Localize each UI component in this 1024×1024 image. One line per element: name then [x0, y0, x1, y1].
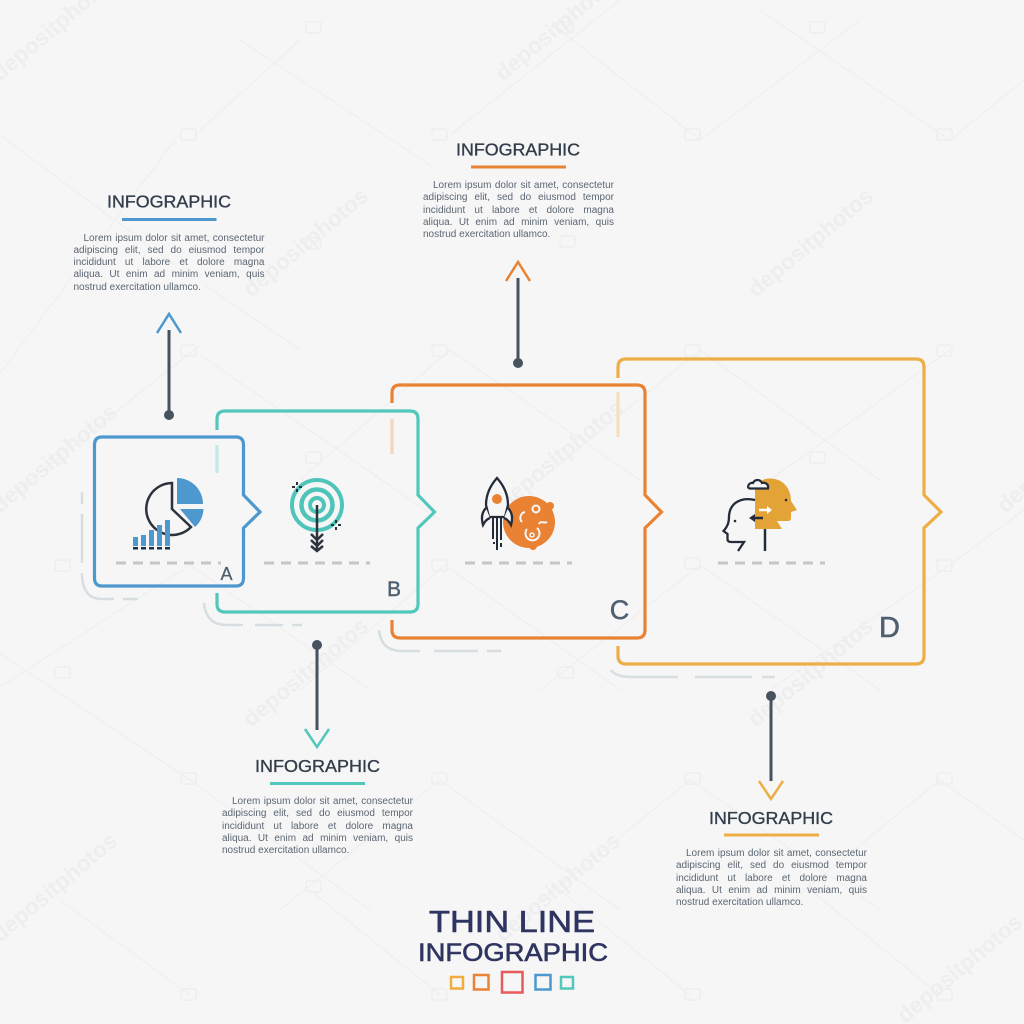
text block B: aliqua. Ut enim ad minim veniam, quis — [222, 833, 413, 844]
text block A: incididunt ut labore et dolore magna — [74, 257, 264, 268]
text block B: nostrud exercitation ullamco. — [222, 845, 349, 856]
heading C: INFOGRAPHIC — [456, 140, 580, 160]
arrow C: up from orange panel — [506, 262, 530, 368]
text block D: aliqua. Ut enim ad minim veniam, quis — [676, 885, 867, 896]
heading A — [107, 192, 231, 221]
arrow A: up from blue panel — [157, 314, 181, 420]
text: depositphotos — [238, 183, 373, 302]
text block A: nostrud exercitation ullamco. — [74, 282, 201, 292]
legend squares — [451, 972, 573, 992]
icon: pie chart and bars — [133, 478, 204, 550]
title: THIN LINE — [429, 905, 595, 939]
text: depositphotos — [238, 613, 373, 732]
text block C: nostrud exercitation ullamco. — [423, 229, 550, 240]
text: depositphotos — [743, 613, 878, 732]
text block C: Lorem ipsum dolor sit amet, consectetur — [433, 180, 614, 191]
text block D: adipiscing elit, sed do eiusmod tempor — [676, 860, 867, 871]
heading D — [709, 808, 833, 836]
text block C: adipiscing elit, sed do eiusmod tempor — [423, 192, 614, 203]
heading B — [255, 756, 380, 785]
panel D: yellow square with notch — [611, 359, 941, 677]
text block B: incididunt ut labore et dolore magna — [222, 820, 413, 832]
text block D: Lorem ipsum dolor sit amet, consectetur — [686, 848, 867, 859]
text block A: Lorem ipsum dolor sit amet, consectetur — [84, 232, 264, 244]
panel A dashed line — [116, 562, 221, 564]
panel B letter: B — [387, 578, 401, 601]
panel A: blue square with notch — [82, 437, 260, 599]
text block D — [676, 848, 867, 908]
text block C: aliqua. Ut enim ad minim veniam, quis — [423, 217, 614, 228]
text: depositphotos — [493, 395, 628, 514]
heading C — [456, 140, 580, 168]
icon: target and arrow — [292, 480, 342, 551]
panel C shadow — [379, 630, 501, 651]
heading A: INFOGRAPHIC — [107, 192, 231, 212]
icon: rocket and planet — [482, 478, 555, 550]
panel C: orange square with notch — [379, 385, 662, 651]
arrow B: down from teal panel — [305, 640, 329, 747]
text block C — [423, 180, 614, 240]
title — [418, 905, 608, 967]
heading B: INFOGRAPHIC — [255, 756, 380, 776]
panel B: teal square with notch — [204, 411, 434, 625]
text block B: Lorem ipsum dolor sit amet, consectetur — [232, 796, 413, 807]
text block A: adipiscing elit, sed do eiusmod tempor — [74, 245, 264, 256]
text block B: adipiscing elit, sed do eiusmod tempor — [222, 808, 413, 819]
panel C letter: C — [610, 595, 629, 625]
panel B faded edge — [215, 445, 219, 473]
panel B shadow — [204, 603, 302, 625]
panel D shadow — [611, 670, 775, 677]
icon: two heads — [724, 479, 797, 551]
text: depositphotos — [743, 183, 878, 302]
panel C faded edge — [390, 419, 394, 454]
panel A shadow — [82, 492, 138, 599]
arrow D: down from yellow panel — [759, 691, 783, 799]
heading D: INFOGRAPHIC — [709, 808, 833, 828]
text block B — [222, 796, 413, 856]
text block C: incididunt ut labore et dolore magna — [423, 204, 614, 216]
panel C dashed line — [465, 562, 572, 564]
text block A — [74, 232, 264, 292]
panel B dashed line — [264, 562, 370, 564]
panel D letter: D — [879, 612, 900, 644]
text block D: nostrud exercitation ullamco. — [676, 897, 803, 908]
panel A letter: A — [220, 564, 233, 584]
text block D: incididunt ut labore et dolore magna — [676, 872, 867, 884]
panel D dashed line — [718, 562, 825, 564]
text: depositphotos — [490, 828, 625, 947]
text block A: aliqua. Ut enim ad minim veniam, quis — [74, 269, 264, 280]
title: INFOGRAPHIC — [418, 939, 608, 967]
panel D faded edge — [616, 392, 620, 437]
